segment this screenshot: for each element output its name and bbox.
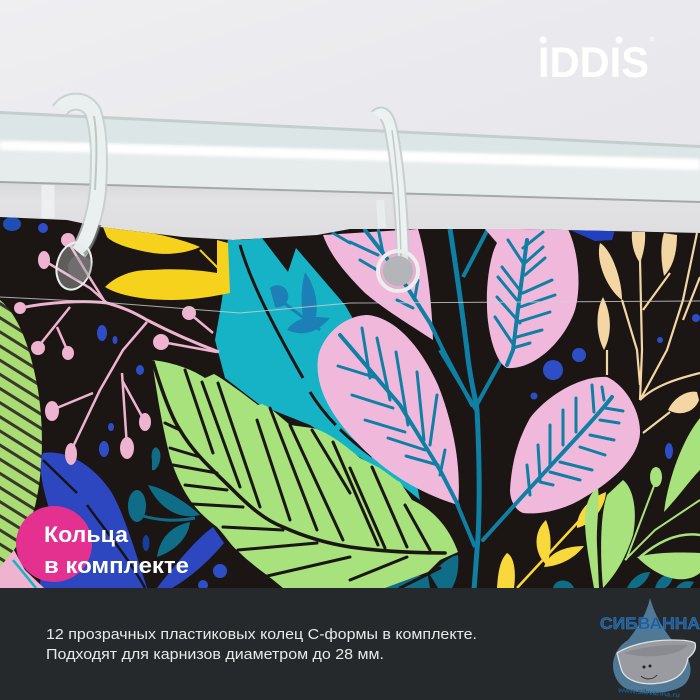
left striped green leaf	[0, 300, 42, 568]
blue dots	[3, 217, 700, 590]
teal leaf	[215, 238, 420, 500]
yellow sprig	[497, 492, 606, 588]
logo: Sibvanna	[600, 598, 700, 699]
blue leaves	[0, 453, 224, 588]
big green leaf	[152, 360, 458, 588]
badge heading: Кольца	[44, 522, 128, 547]
ring with eyelet left	[48, 102, 100, 294]
logo: IDDIS: IDDIS	[538, 39, 649, 87]
yellow leaves	[103, 227, 230, 300]
wall background	[0, 0, 700, 220]
shower rod	[0, 111, 700, 203]
curtain stitch line	[0, 297, 700, 313]
pink leaf upper right	[485, 229, 579, 368]
pink leaf upper left	[323, 228, 472, 405]
pink branch with berries	[14, 233, 219, 465]
badge: pink circle	[16, 506, 92, 582]
curtain upper white band	[0, 180, 700, 245]
caption text	[46, 626, 477, 663]
logo: Sibvanna: СИБВАННА	[600, 614, 700, 633]
panel: patterned curtain fabric	[0, 210, 700, 590]
badge heading: в комплекте	[44, 553, 189, 578]
main teal stem	[440, 229, 507, 590]
dark teal sprigs	[128, 447, 694, 588]
pink leaf lower left	[318, 315, 459, 505]
badge heading	[44, 522, 189, 578]
caption text: 12 прозрачных пластиковых колец С-формы в комплекте.	[46, 626, 477, 643]
panel: dark caption	[0, 588, 700, 700]
logo: Sibvanna: www.sibvanna.ru	[617, 687, 680, 699]
ring with eyelet right	[376, 114, 418, 291]
beige branches	[597, 232, 700, 433]
caption text: Подходят для карнизов диаметром до 28 мм.	[46, 646, 384, 663]
green sprigs bottom right	[585, 418, 700, 588]
pink leaf right	[483, 377, 640, 540]
